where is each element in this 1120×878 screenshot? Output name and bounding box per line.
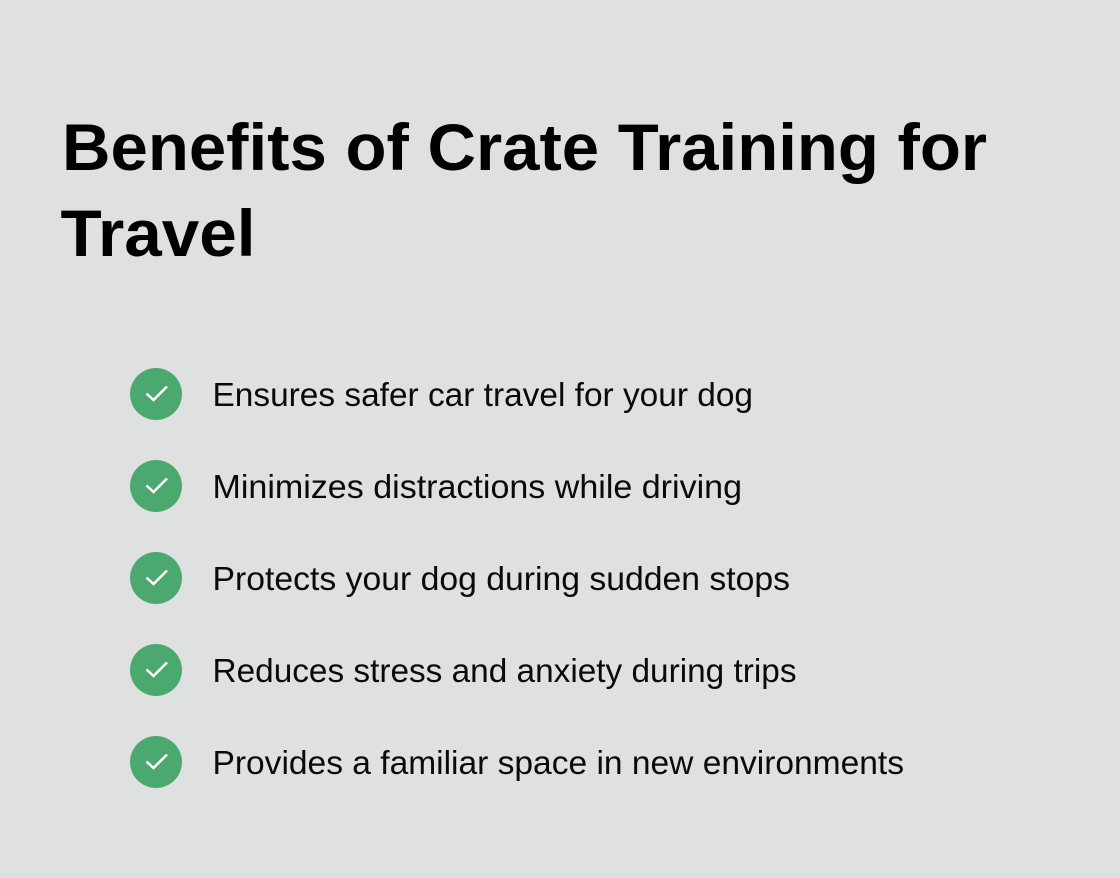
list item: minimizes distractions: Minimizes distractions while driving bbox=[212, 468, 742, 505]
list item: sudden stops bbox=[130, 552, 790, 604]
list item: familiar space bbox=[130, 736, 904, 788]
benefits list bbox=[130, 368, 904, 788]
title: Benefits of Crate Training for bbox=[62, 110, 987, 184]
list item: safer car travel bbox=[130, 368, 753, 420]
title: Travel bbox=[60, 196, 256, 270]
title bbox=[60, 110, 987, 270]
list item: stress and anxiety bbox=[130, 644, 796, 696]
list item: sudden stops: Protects your dog during sudden stops bbox=[212, 560, 790, 597]
list item: stress and anxiety: Reduces stress and anxiety during trips bbox=[212, 652, 796, 689]
list item: safer car travel: Ensures safer car travel for your dog bbox=[212, 376, 753, 413]
list item: minimizes distractions bbox=[130, 460, 742, 512]
list item: familiar space: Provides a familiar space in new environments bbox=[212, 744, 904, 781]
